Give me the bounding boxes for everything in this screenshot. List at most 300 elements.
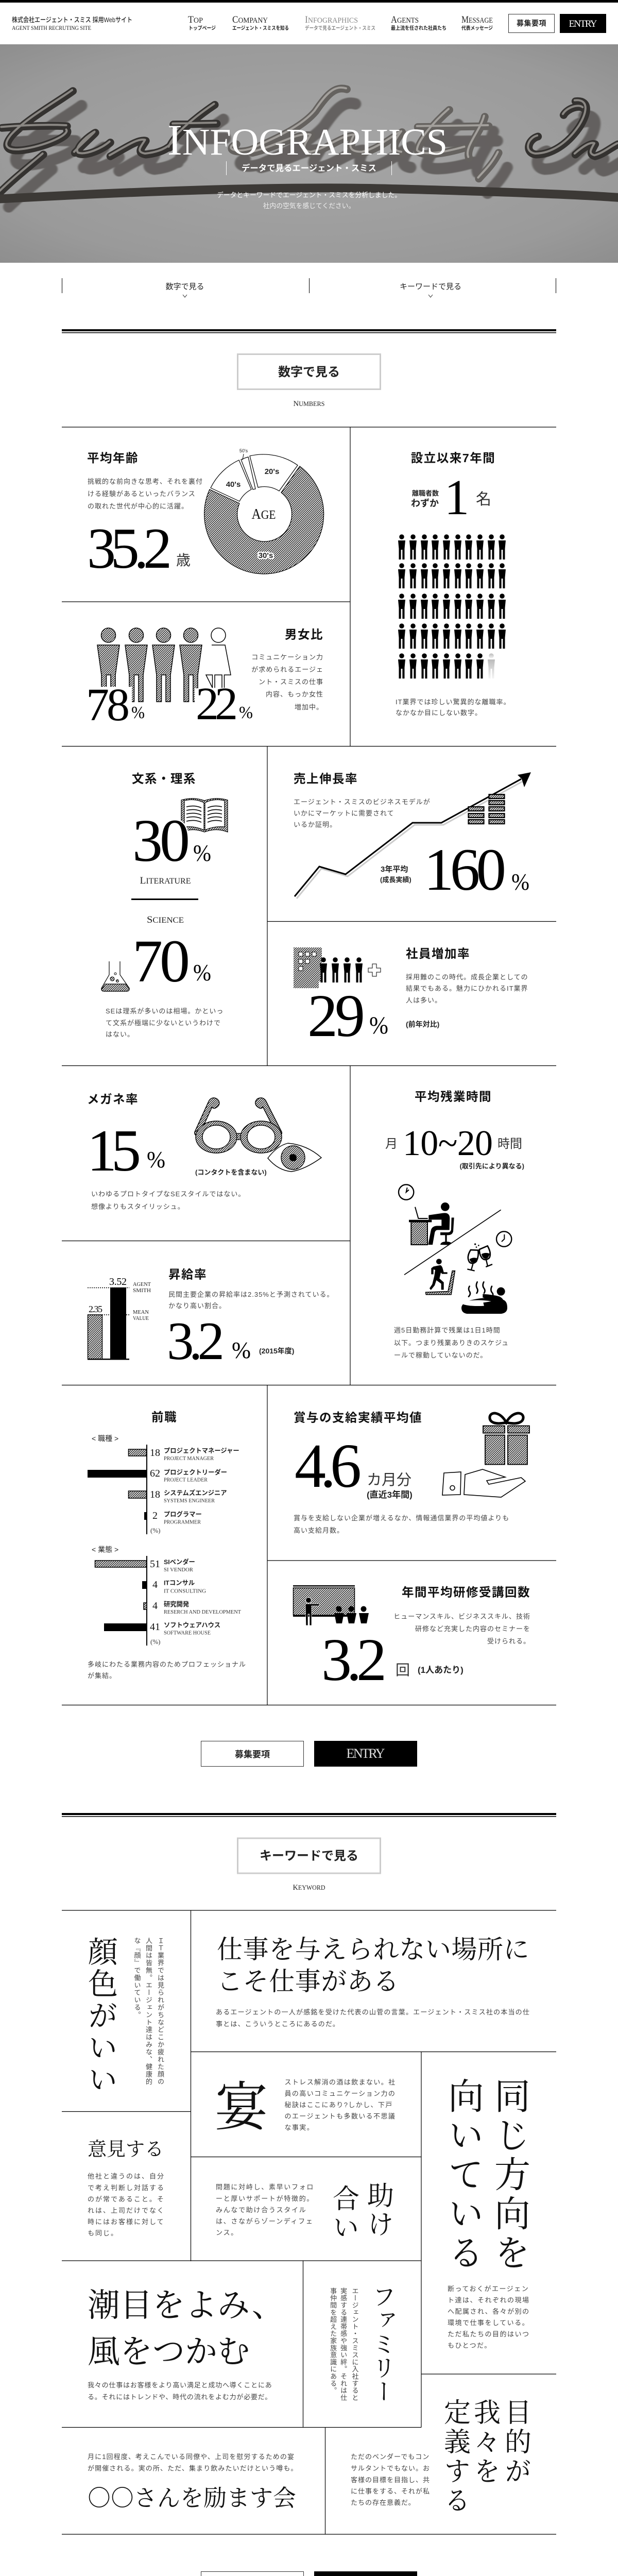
label: literature: LITERATURE [140, 875, 191, 886]
nav: agents: 最上流を任された社員たち [391, 25, 447, 31]
chart: business type: IT CONSULTING [164, 1588, 206, 1594]
panel: average age [87, 448, 324, 581]
description: 他社と違うのは、自分 [88, 2172, 165, 2180]
button: entry [314, 2571, 417, 2576]
description: ただのベンダーでもコン [351, 2453, 430, 2461]
title: 仕事を与えられない場所に [217, 1929, 529, 1966]
big number: (1人あたり) [418, 1665, 464, 1675]
big number [321, 1626, 464, 1693]
big number: 29 [307, 982, 365, 1049]
section heading: numbers [238, 354, 380, 408]
section heading: keywords: KEYWORD [293, 1884, 325, 1892]
big number [295, 1431, 413, 1501]
bar chart: AGENT [133, 1281, 151, 1287]
chart: job type: 18 [150, 1489, 160, 1500]
description: 週5日勤務計算で残業は1日1時間 [394, 1326, 501, 1334]
section heading: numbers: 数字で見る [278, 365, 340, 379]
description [216, 2183, 314, 2236]
description: 研修など充実した内容のセミナーを [415, 1625, 530, 1633]
description [88, 2453, 298, 2472]
title [217, 1929, 529, 1998]
donut chart: 30's [259, 551, 273, 560]
description: たちの存在意義だ。 [351, 2499, 416, 2506]
description: 増加中。 [295, 703, 323, 711]
big number: % [232, 1337, 251, 1363]
people grid [398, 534, 506, 679]
description: ールで稼動していないのだ。 [394, 1351, 487, 1359]
big number: カ月分 [367, 1472, 411, 1488]
title: 顔色がいい [81, 1936, 125, 2096]
button: recruit [509, 14, 554, 33]
chart: business type: 4 [152, 1600, 158, 1612]
chart: job type: SYSTEMS ENGINEER [164, 1498, 215, 1504]
vertical description [133, 1937, 164, 2086]
chart: job type: プロジェクトマネージャー [164, 1447, 239, 1454]
heading: 売上伸長率 [294, 772, 358, 785]
bar chart: MEAN [133, 1309, 149, 1315]
description: 以下。つまり残業ありきのスケジュ [394, 1339, 509, 1347]
big number: (2015年度) [259, 1347, 294, 1355]
header [12, 14, 606, 33]
big number: 時間 [497, 1137, 522, 1151]
donut chart: 20's [265, 467, 279, 476]
anchor: keywords: キーワードで見る [400, 282, 461, 291]
keyword: work where none is given [216, 1929, 530, 2028]
big number: % [511, 869, 529, 895]
label [411, 489, 439, 509]
heading: 平均年齢 [87, 451, 139, 465]
description: 受けられる。 [487, 1637, 530, 1645]
description: IT業界では珍しい驚異的な離職率。 [396, 698, 511, 706]
description: のが常であること。そ [88, 2195, 165, 2203]
description: なかなか目にしない数字。 [396, 709, 482, 717]
description: 時にはお客様に対して [88, 2218, 165, 2226]
description: サルタントでもない。お [351, 2465, 430, 2472]
chart: business type: 51 [150, 1558, 160, 1570]
description: もひとつだ。 [448, 2342, 492, 2349]
description: が集結。 [88, 1672, 116, 1680]
heading: 前職 [151, 1411, 177, 1424]
icon: open book [181, 799, 228, 832]
donut chart: AGE [251, 506, 276, 522]
icons: male and female figures [84, 628, 240, 723]
heading: 平均残業時間 [415, 1089, 492, 1104]
button: entry: ENTRY [346, 1746, 385, 1761]
description: あるエージェントの一人が感銘を受けた代表の山菅の言葉。エージェント・スミス社の本当の仕 [216, 2008, 530, 2016]
chart: business type: 41 [150, 1621, 160, 1633]
title: 定義する [438, 2398, 477, 2516]
description [88, 2381, 272, 2401]
description: 賞与を支給しない企業が増えるなか、情報通信業界の平均値よりも [294, 1514, 509, 1522]
chart: business type: (%) [150, 1638, 161, 1646]
chart: job type: プログラマー [164, 1511, 202, 1518]
chart: business type: RESERCH AND DEVELOPMENT [164, 1609, 241, 1615]
title: こそ仕事がある [217, 1961, 399, 1998]
description [106, 1007, 224, 1038]
title: ファミリー [367, 2284, 401, 2403]
description [88, 2172, 165, 2237]
label: 3 year average [380, 865, 411, 884]
description [351, 2453, 430, 2506]
description: も同じ。 [88, 2229, 118, 2237]
bar chart: SMITH [133, 1287, 151, 1294]
title: 潮目をよみ、 [88, 2279, 284, 2326]
keyword: facing the same direction [440, 2077, 539, 2349]
title [327, 2181, 400, 2242]
big number: 35.2 [87, 517, 172, 581]
panel: overtime [385, 1089, 524, 1359]
heading: 社員増加率 [406, 947, 470, 960]
chart: business type: 4 [152, 1579, 158, 1590]
description: 客様の目標を目指し、共 [351, 2476, 430, 2484]
description: いわゆるプロトタイプなSEスタイルではない。 [91, 1190, 245, 1198]
description: で考え判断し対話する [88, 2184, 165, 2192]
description: いるか証明。 [294, 821, 337, 828]
heading: 設立以来7年間 [411, 451, 495, 465]
anchor: keywords [400, 282, 461, 297]
keyword: mutual help [216, 2181, 400, 2242]
description: ストレス解消の酒は飲まない。社 [284, 2078, 396, 2086]
chart: job type: (%) [150, 1527, 161, 1534]
hero photo background [0, 44, 618, 263]
chart: job type: PROJECT LEADER [164, 1477, 208, 1483]
icon: glasses and eye [196, 1100, 321, 1172]
donut chart: 50's [239, 448, 248, 453]
description: SEは理系が多いのは相場。かといっ [106, 1007, 224, 1015]
title: 合い [327, 2184, 366, 2242]
heading: 昇給率 [168, 1267, 207, 1281]
bar chart [88, 1276, 151, 1360]
description: 我々の仕事はお客様をより高い満足と成功へ導くことにあ [88, 2381, 272, 2389]
big number: 名 [476, 491, 491, 508]
title: 風をつかむ [88, 2326, 250, 2372]
keyword: good complexion [81, 1936, 164, 2096]
label: わずか [411, 498, 439, 509]
label: 離職者数 [412, 489, 439, 497]
label: 3 year average: (成長実績) [380, 876, 411, 884]
bar chart: VALUE [133, 1315, 149, 1321]
hero description: データとキーワードでエージェント・スミスを分析しました。 [217, 191, 401, 199]
chart: business type: ソフトウェアハウス [164, 1622, 220, 1629]
anchor: numbers [165, 282, 204, 297]
label: science: SCIENCE [147, 914, 184, 925]
percent: male: 78 [86, 680, 130, 731]
section heading: keywords [238, 1838, 380, 1892]
keyword: read the tide [88, 2279, 284, 2401]
hero title: INFOGRAPHICS [167, 116, 448, 164]
description [406, 973, 528, 1004]
description [216, 2008, 530, 2028]
button row 2 [201, 2571, 417, 2576]
button: recruit: 募集要項 [517, 19, 546, 27]
description: ンス。 [216, 2229, 238, 2236]
panel: glasses rate [87, 1092, 321, 1211]
title: 我々を [468, 2398, 507, 2486]
keyword: speak your mind [88, 2133, 165, 2237]
description [168, 1291, 334, 1310]
vertical description: 人間は皆無。エージェント達はみな、健康的 [145, 1937, 152, 2086]
keyword: family [329, 2284, 401, 2403]
big number: (直近3年間) [367, 1489, 413, 1500]
button: recruit: 募集要項 [235, 1750, 270, 1759]
description: 想像よりもスタイリッシュ。 [91, 1202, 185, 1211]
description [88, 1660, 246, 1680]
vertical description: な『顔』で働いている。 [133, 1937, 141, 2019]
chart: job type [88, 1434, 239, 1534]
description: て文系が極端に少ないというわけで [106, 1019, 221, 1027]
divider bar [131, 899, 198, 900]
heading: 賞与の支給実績平均値 [294, 1411, 422, 1424]
description: ト達は、それぞれの現場 [448, 2296, 530, 2304]
description: コミュニケーション力 [251, 653, 323, 661]
keyword: banquet [215, 2064, 396, 2141]
chart: business type: SI VENDOR [164, 1567, 194, 1573]
description: れは、上司だけでなく [88, 2207, 165, 2214]
button: recruit [201, 1741, 304, 1766]
description [88, 478, 203, 510]
note: (コンタクトを含まない) [195, 1168, 267, 1176]
nav: company: エージェント・スミスを知る [232, 25, 289, 31]
stat: science 70%: 70 [132, 927, 190, 995]
description [284, 2078, 396, 2131]
nav: agents: AGENTS [391, 14, 419, 25]
description: 環境で仕事をしている。 [448, 2319, 529, 2327]
percent: female: % [239, 703, 253, 722]
description: が求められるエージェ [251, 666, 323, 673]
description: が開催される。実の所、ただ、集まり飲みたいだけという噂も。 [88, 2465, 298, 2472]
panel: raise rate [88, 1267, 334, 1371]
description: 結果でもある。魅力にひかれるIT業界 [406, 985, 528, 992]
nav: company: COMPANY [232, 14, 268, 25]
chart: job type: 18 [150, 1447, 160, 1459]
icon: seminar [293, 1585, 369, 1625]
description: 問題に対峙し、素早いフォロ [216, 2183, 314, 2191]
description: はない。 [106, 1030, 134, 1038]
description: 月に1回程度、考えこんでいる同僚や、上司を慰労するための宴 [88, 2453, 295, 2461]
title [438, 2398, 538, 2516]
chart: job type: 2 [152, 1510, 158, 1521]
big number: 4.6 [295, 1431, 362, 1501]
icon: gift on hand [442, 1413, 529, 1497]
big number: 歳 [176, 552, 191, 568]
anchor: numbers: 数字で見る [165, 282, 204, 291]
icon: work and leisure scene [399, 1184, 511, 1295]
description: ける経験があるといったバランス [88, 490, 196, 498]
nav: top: トップページ [188, 25, 216, 31]
stat: literature 30%: % [193, 840, 211, 866]
description: 多岐にわたる業務内容のためプロフェッショナル [88, 1660, 246, 1668]
description: いかにマーケットに需要されて [294, 809, 394, 817]
nav: message: 代表メッセージ [461, 25, 493, 31]
description: 断っておくがエージェン [448, 2285, 529, 2293]
chart: job type: PROJECT MANAGER [164, 1455, 214, 1462]
icon: hot spring [461, 1282, 507, 1314]
panel: training [293, 1585, 530, 1693]
donut chart [204, 448, 324, 574]
label: 3 year average: 3年平均 [381, 865, 408, 874]
description: 事とは、こういうところにあるのだ。 [216, 2020, 340, 2028]
nav: agents [391, 14, 447, 31]
big number: % [369, 1012, 388, 1039]
description [396, 698, 511, 717]
big number [167, 1311, 294, 1371]
panel: gender ratio [84, 628, 323, 731]
note: (前年対比) [406, 1020, 439, 1028]
big number: 回 [396, 1662, 410, 1678]
button: recruit [201, 2572, 304, 2576]
description: の取れた世代が中心的に活躍。 [88, 502, 188, 510]
heading: 男女比 [285, 628, 323, 641]
vertical description: ＩＴ業界では見られがちなどこか疲れた顔の [157, 1937, 164, 2086]
description [91, 1190, 245, 1211]
hero description [217, 191, 401, 210]
description: のエージェントも多数いる不思議 [284, 2112, 396, 2120]
line chart with arrow [295, 772, 531, 899]
nav: message: MESSAGE [461, 14, 493, 25]
button: entry [314, 1741, 417, 1767]
title: 同じ方向を [486, 2077, 539, 2273]
icon: building and people [294, 947, 381, 988]
nav: top: TOP [188, 14, 203, 25]
description: 民間主要企業の昇給率は2.35%と予測されている。 [168, 1291, 334, 1298]
nav: infographics: INFOGRAPHICS [305, 14, 358, 25]
keyword: cheer-up party [88, 2453, 298, 2513]
big number: 3.2 [321, 1626, 387, 1693]
big number: 1 [444, 470, 469, 525]
big number [385, 1124, 522, 1163]
description: 内容、もっか女性 [266, 690, 323, 698]
big number: 月 [385, 1137, 398, 1151]
nav: message [461, 14, 493, 31]
vertical description: 事仲間を超えた家族意識にある。 [329, 2287, 337, 2394]
site subtitle: AGENT SMITH RECRUTING SITE [12, 25, 91, 31]
stat: science 70%: % [193, 960, 211, 986]
icon: flask [101, 961, 129, 991]
vertical description: 実感する連帯感や強い絆。それは仕 [339, 2287, 347, 2401]
description: ヒューマンスキル、ビジネススキル、技術 [393, 1613, 530, 1620]
panel: headcount growth [294, 947, 528, 1049]
description: 人は多い。 [406, 996, 442, 1004]
anchor nav [62, 278, 556, 297]
big number [87, 1118, 165, 1184]
hero description: 社内の空気を感じてください。 [263, 202, 355, 210]
big number: % [147, 1146, 165, 1173]
description [294, 798, 431, 828]
hero [0, 44, 618, 263]
panel: turnover since founding [396, 451, 511, 717]
big number: 10~20 [403, 1124, 493, 1163]
chart: business type: ITコンサル [164, 1580, 195, 1587]
description: かなり高い割合。 [168, 1302, 226, 1310]
bar chart: 3.52 [109, 1276, 127, 1287]
donut chart: 40's [226, 480, 241, 489]
nav: infographics: データで見るエージェント・スミス [305, 25, 375, 31]
description: 挑戦的な前向きな思考、それを裏付 [88, 478, 203, 485]
vertical description: エージェント・スミスに入社すると [351, 2287, 358, 2401]
heading: 文系・理系 [132, 772, 196, 785]
chart: business type: < 業態 > [92, 1546, 118, 1554]
heading: メガネ率 [87, 1092, 139, 1106]
description [251, 653, 323, 711]
chart: business type [92, 1546, 241, 1646]
chart: business type: SOFTWARE HOUSE [164, 1630, 211, 1636]
description: 員の高いコミュニケーション力の [284, 2090, 396, 2097]
vertical description [329, 2287, 358, 2401]
description: エージェント・スミスのビジネスモデルが [294, 798, 431, 806]
button: entry: ENTRY [569, 19, 597, 29]
button row 1 [201, 1741, 417, 1767]
big number: 15 [87, 1118, 141, 1184]
panel: previous jobs [88, 1411, 246, 1680]
panel: humanities vs science [101, 772, 228, 1038]
description [393, 1613, 530, 1645]
chart: job type: PROGRAMMER [164, 1519, 201, 1525]
description: ント・スミスの仕事 [259, 678, 323, 686]
chart: business type: SIベンダー [164, 1558, 195, 1566]
panel: bonus [294, 1411, 529, 1534]
note: (取引先により異なる) [460, 1162, 524, 1170]
nav: company [232, 14, 289, 31]
big number: 160 [424, 837, 506, 903]
description [448, 2285, 530, 2349]
description: ただ私たちの目的はいつ [448, 2330, 530, 2338]
section heading: numbers: NUMBERS [294, 400, 325, 408]
top black bar [0, 0, 618, 3]
keyword: purpose defines us [351, 2398, 538, 2516]
description: 秘訣はここにあり?しかし、下戸 [284, 2101, 393, 2109]
description: な事実。 [284, 2124, 314, 2131]
big number [444, 470, 491, 525]
description: る。それにはトレンドや、時代の流れをよむ力が必要だ。 [88, 2393, 272, 2401]
button: entry [560, 14, 606, 33]
description: ーと厚いサポートが特徴的。 [216, 2195, 314, 2202]
description [294, 1514, 509, 1534]
site title: 株式会社エージェント・スミス 採用Webサイト [12, 16, 132, 24]
title: 宴 [215, 2064, 268, 2141]
description: へ配属され、各々が別の [448, 2308, 530, 2315]
description: 採用難のこの時代。成長企業としての [406, 973, 528, 981]
description [394, 1326, 509, 1359]
section heading: keywords: キーワードで見る [260, 1849, 358, 1863]
title [440, 2077, 539, 2273]
percent: male: % [131, 703, 145, 722]
description: は、さながらゾーンディフェ [216, 2217, 314, 2225]
chart: job type: < 職種 > [92, 1434, 118, 1443]
title: ○○さんを励ます会 [88, 2479, 296, 2513]
chart: job type: システムズエンジニア [164, 1489, 227, 1497]
title: 向いている [440, 2077, 492, 2273]
hero subtitle with side rules: データで見るエージェント・スミス [242, 163, 376, 173]
nav: top [188, 14, 216, 31]
panel: sales growth [294, 772, 531, 903]
chart: business type: 研究開発 [164, 1600, 190, 1608]
heading: 年間平均研修受講回数 [402, 1586, 530, 1599]
description: に仕事をする、それが私 [351, 2487, 430, 2495]
bar chart: 2.35 [89, 1304, 102, 1314]
title [88, 2279, 284, 2372]
title: 目的が [499, 2398, 538, 2486]
icon: stacked bars [469, 794, 505, 824]
description: 高い支給月数。 [294, 1527, 344, 1534]
chart: job type: プロジェクトリーダー [164, 1468, 227, 1476]
chart: job type: 62 [150, 1468, 160, 1479]
title: 助け [362, 2181, 400, 2239]
stat: literature 30%: 30 [132, 807, 190, 874]
description: みんなで助け合うスタイル [216, 2206, 306, 2214]
hero photo: metal script sign [0, 84, 618, 213]
nav: infographics [305, 14, 375, 31]
title: 意見する [88, 2133, 164, 2161]
